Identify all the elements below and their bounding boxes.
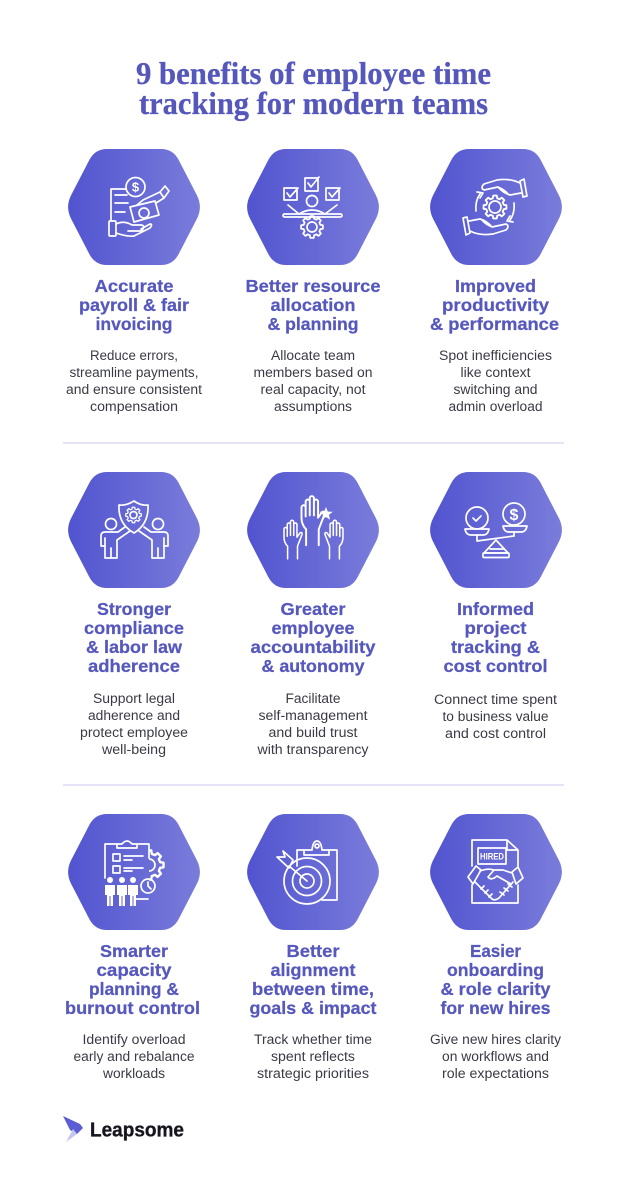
description	[254, 348, 372, 414]
description: workloads	[102, 1066, 165, 1081]
description: with transparency	[256, 742, 369, 757]
heading	[440, 941, 551, 1018]
description	[74, 1032, 194, 1081]
icon: hired document with handshake	[468, 840, 523, 903]
heading: planning &	[89, 979, 179, 999]
heading: Accurate	[94, 276, 174, 296]
title: 9 benefits of employee time	[136, 55, 491, 91]
heading	[250, 599, 376, 676]
panel: capacity planning	[65, 814, 200, 1081]
panel: compliance	[68, 472, 200, 757]
description: streamline payments,	[70, 365, 198, 380]
heading: for new hires	[440, 998, 551, 1018]
panel: resource allocation	[246, 149, 381, 414]
description: spent reflects	[271, 1049, 355, 1064]
icon: payroll hand with coin and invoice: $	[132, 180, 140, 194]
heading: alignment	[270, 960, 356, 980]
heading: allocation	[270, 295, 356, 315]
icon: person balancing checkboxes above gear	[283, 177, 342, 238]
description: switching and	[454, 382, 538, 397]
wordmark: Leapsome	[90, 1120, 184, 1142]
heading	[430, 276, 559, 334]
panel: onboarding	[430, 814, 562, 1081]
description: well-being	[101, 742, 166, 757]
heading: employee	[272, 618, 355, 638]
description: Support legal	[93, 691, 175, 706]
heading	[246, 276, 381, 334]
heading	[79, 276, 189, 334]
description: early and rebalance	[74, 1049, 194, 1064]
icon: clipboard with target and arrow	[277, 841, 337, 904]
hexagon background	[247, 472, 379, 588]
heading	[65, 941, 200, 1018]
hexagon background	[247, 814, 379, 930]
description: Spot inefficiencies	[439, 348, 552, 363]
heading: Informed	[457, 599, 534, 619]
description: compensation	[90, 399, 178, 414]
description: Allocate team	[271, 348, 355, 363]
title: tracking for modern teams	[139, 85, 488, 121]
description	[254, 1032, 372, 1081]
hexagon background	[247, 149, 379, 265]
icon: two hands around a gear	[463, 179, 527, 235]
description: assumptions	[274, 399, 352, 414]
description: Reduce errors,	[90, 348, 178, 363]
heading: & labor law	[86, 637, 182, 657]
heading: Better	[286, 941, 340, 961]
icon: raised hands with star	[284, 496, 343, 559]
hexagon background	[430, 472, 562, 588]
description: on workflows and	[442, 1049, 549, 1064]
panel: accountability	[247, 472, 379, 757]
heading: payroll & fair	[79, 295, 189, 315]
panel: alignment	[247, 814, 379, 1081]
heading: compliance	[84, 618, 184, 638]
heading: Easier	[470, 941, 521, 961]
description	[66, 348, 202, 414]
heading	[444, 599, 548, 676]
description	[439, 348, 552, 414]
description: protect employee	[80, 725, 188, 740]
icon: balance scale with check and dollar	[465, 503, 527, 558]
heading: capacity	[96, 960, 172, 980]
icon: clipboard with team, gear and clock	[105, 841, 164, 906]
hexagon background	[68, 149, 200, 265]
heading: Better resource	[246, 276, 381, 296]
panel: productivity	[430, 149, 562, 414]
description: Connect time spent	[434, 692, 557, 707]
description: members based on	[254, 365, 372, 380]
heading: accountability	[250, 637, 376, 657]
panel: project tracking	[430, 472, 562, 741]
heading: Stronger	[97, 599, 171, 619]
heading: goals & impact	[250, 998, 377, 1018]
heading: burnout control	[65, 998, 200, 1018]
logo: Leapsome	[63, 1116, 184, 1142]
description: real capacity, not	[260, 382, 366, 397]
icon: balance scale with check and dollar: $	[510, 507, 519, 524]
panel: accurate payroll	[66, 149, 202, 414]
description: like context	[460, 365, 531, 380]
description	[256, 691, 369, 757]
heading: tracking &	[451, 637, 540, 657]
heading: productivity	[442, 295, 549, 315]
heading: onboarding	[447, 960, 544, 980]
description	[434, 692, 557, 741]
hexagon background	[68, 814, 200, 930]
title	[136, 55, 491, 121]
description: to business value	[442, 709, 548, 724]
heading: & planning	[268, 314, 358, 334]
description: and ensure consistent	[66, 382, 202, 397]
description: and cost control	[445, 726, 546, 741]
hexagon background	[430, 814, 562, 930]
heading	[84, 599, 184, 676]
hexagon background	[68, 472, 200, 588]
description: Identify overload	[82, 1032, 186, 1047]
description: Track whether time	[254, 1032, 372, 1047]
heading: & role clarity	[440, 979, 551, 999]
heading: invoicing	[96, 314, 172, 334]
heading	[250, 941, 377, 1018]
heading: adherence	[88, 656, 180, 676]
description	[80, 691, 188, 757]
heading: & performance	[430, 314, 559, 334]
description: strategic priorities	[257, 1066, 369, 1081]
description: admin overload	[448, 399, 542, 414]
description: and build trust	[268, 725, 358, 740]
description: adherence and	[88, 708, 180, 723]
description: self-management	[258, 708, 368, 723]
heading: between time,	[252, 979, 374, 999]
heading: cost control	[444, 656, 548, 676]
description: Give new hires clarity	[430, 1032, 561, 1047]
icon: two people holding a shield	[101, 501, 168, 558]
icon: bird mark	[63, 1116, 83, 1142]
description: role expectations	[442, 1066, 549, 1081]
description	[430, 1032, 561, 1081]
icon: hired document with handshake: HIRED	[480, 852, 504, 862]
heading: Improved	[455, 276, 536, 296]
heading: Smarter	[100, 941, 168, 961]
heading: Greater	[280, 599, 346, 619]
heading: project	[464, 618, 527, 638]
hexagon background	[430, 149, 562, 265]
heading: & autonomy	[262, 656, 365, 676]
description: Facilitate	[286, 691, 340, 706]
icon: payroll hand with coin and invoice	[109, 178, 169, 236]
